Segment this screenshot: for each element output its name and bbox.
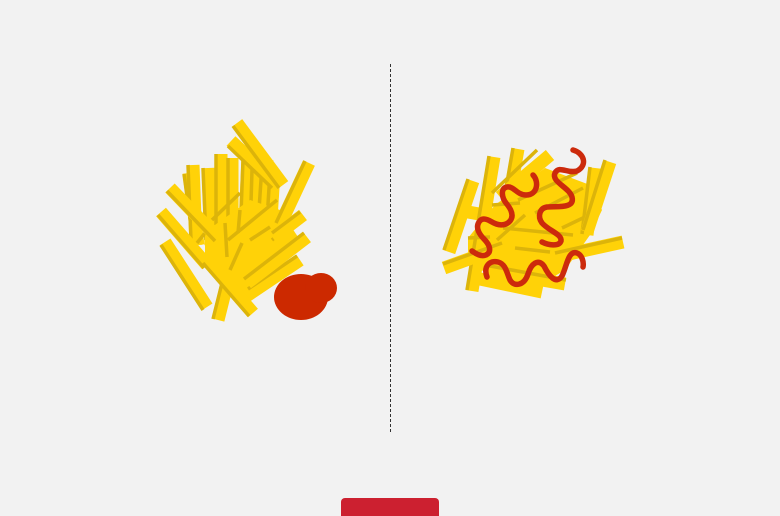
icon: pile of fries <box>443 148 623 292</box>
right panel: fries with ketchup on top <box>443 148 623 292</box>
divider: dashed line <box>390 64 392 433</box>
icon: ketchup squiggle two <box>540 150 584 245</box>
icon: ketchup blob <box>274 273 337 320</box>
icon: ketchup squiggle one <box>472 175 537 256</box>
red button tab <box>341 498 439 516</box>
icon: pile of fries <box>158 123 309 320</box>
icon: ketchup squiggle three <box>486 253 583 284</box>
left panel: fries with ketchup on the side <box>158 123 337 320</box>
